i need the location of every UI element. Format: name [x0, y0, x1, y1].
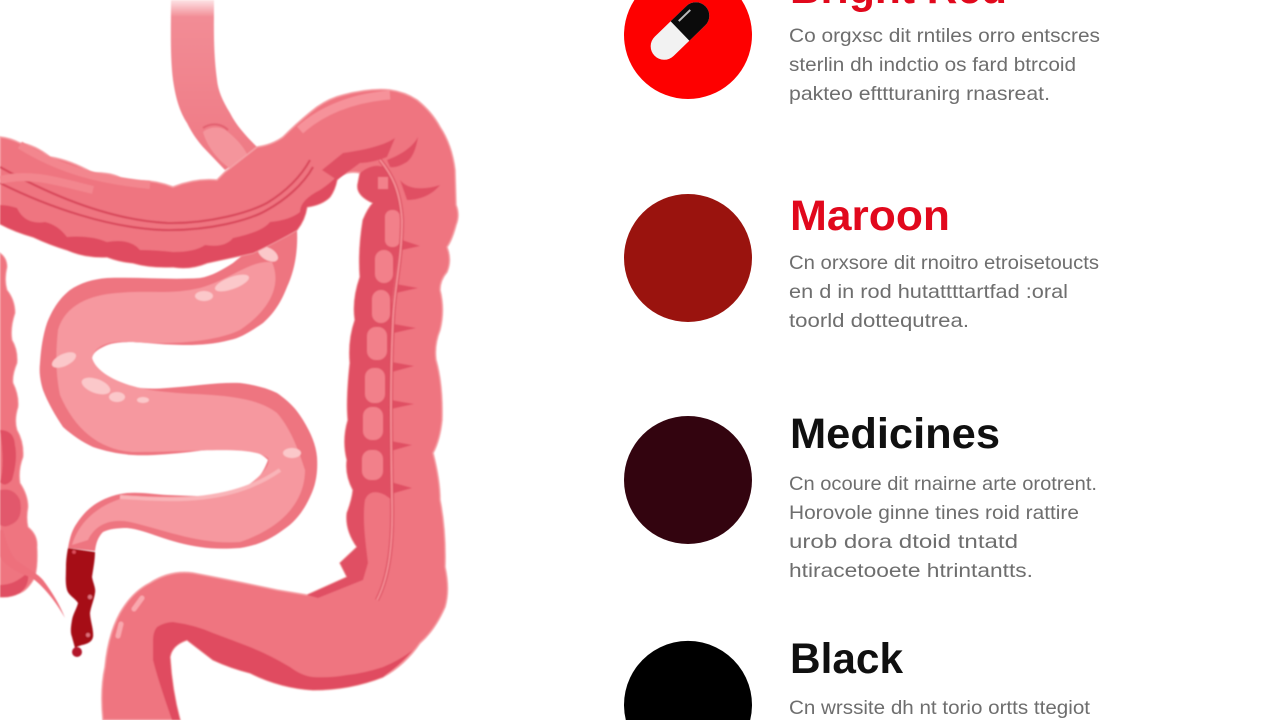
row: black [624, 635, 1091, 720]
row: bright red [624, 0, 1100, 105]
left column haustra [362, 177, 400, 480]
right column notches [391, 240, 420, 494]
text block: bright red description: Co orgxsc dit rntiles orro entscres [789, 25, 1100, 47]
icon: maroon circle [624, 194, 752, 322]
esophagus [171, 0, 258, 171]
text block: bright red description: sterlin dh indctio os fard btrcoid [789, 54, 1076, 76]
colon base shape [0, 90, 458, 720]
blood stream [66, 548, 95, 657]
right colon dark strip [307, 166, 402, 598]
text block: maroon description: en d in rod hutattttartfad :oral [789, 281, 1068, 303]
tube outline [40, 228, 317, 551]
icon: dark circle [624, 416, 752, 544]
icon: black circle [624, 641, 752, 720]
tube interior [56, 262, 305, 545]
heading: Medicines: Medicines [790, 410, 1000, 458]
text block: medicines description: Horovole ginne tines roid rattire [789, 502, 1079, 524]
heading: Black: Black [790, 635, 903, 683]
bottom colon shading [153, 622, 413, 720]
icon: bright red circle with capsule [624, 0, 752, 99]
left colon [0, 253, 65, 618]
heading: Maroon: Maroon [790, 192, 950, 240]
text block: maroon description: toorld dottequtrea. [789, 310, 969, 332]
top bend dark wedges [322, 137, 440, 200]
transverse lines [0, 160, 313, 230]
bottom colon highlights [118, 598, 142, 636]
text block: maroon description: Cn orxsore dit rnoitro etroisetoucts [789, 252, 1099, 274]
taenia line [377, 160, 402, 600]
row: maroon [624, 192, 1099, 332]
text block: black description: Cn wrssite dh nt torio ortts ttegiot [789, 697, 1091, 719]
large intestine [0, 90, 458, 720]
tube highlights [50, 243, 301, 458]
text block: medicines description: Cn ocoure dit rnairne arte orotrent. [789, 473, 1097, 495]
row: medicines [624, 410, 1097, 582]
transverse dark rim [0, 170, 342, 268]
illustration: digestive tract [0, 0, 458, 720]
text block: medicines description: urob dora dtoid tntatd [789, 531, 1018, 553]
small intestine [40, 228, 317, 551]
text block: bright red description: pakteo efttturanirg rnasreat. [789, 83, 1050, 105]
text block: medicines description: htiracetooete htrintantts. [789, 560, 1033, 582]
